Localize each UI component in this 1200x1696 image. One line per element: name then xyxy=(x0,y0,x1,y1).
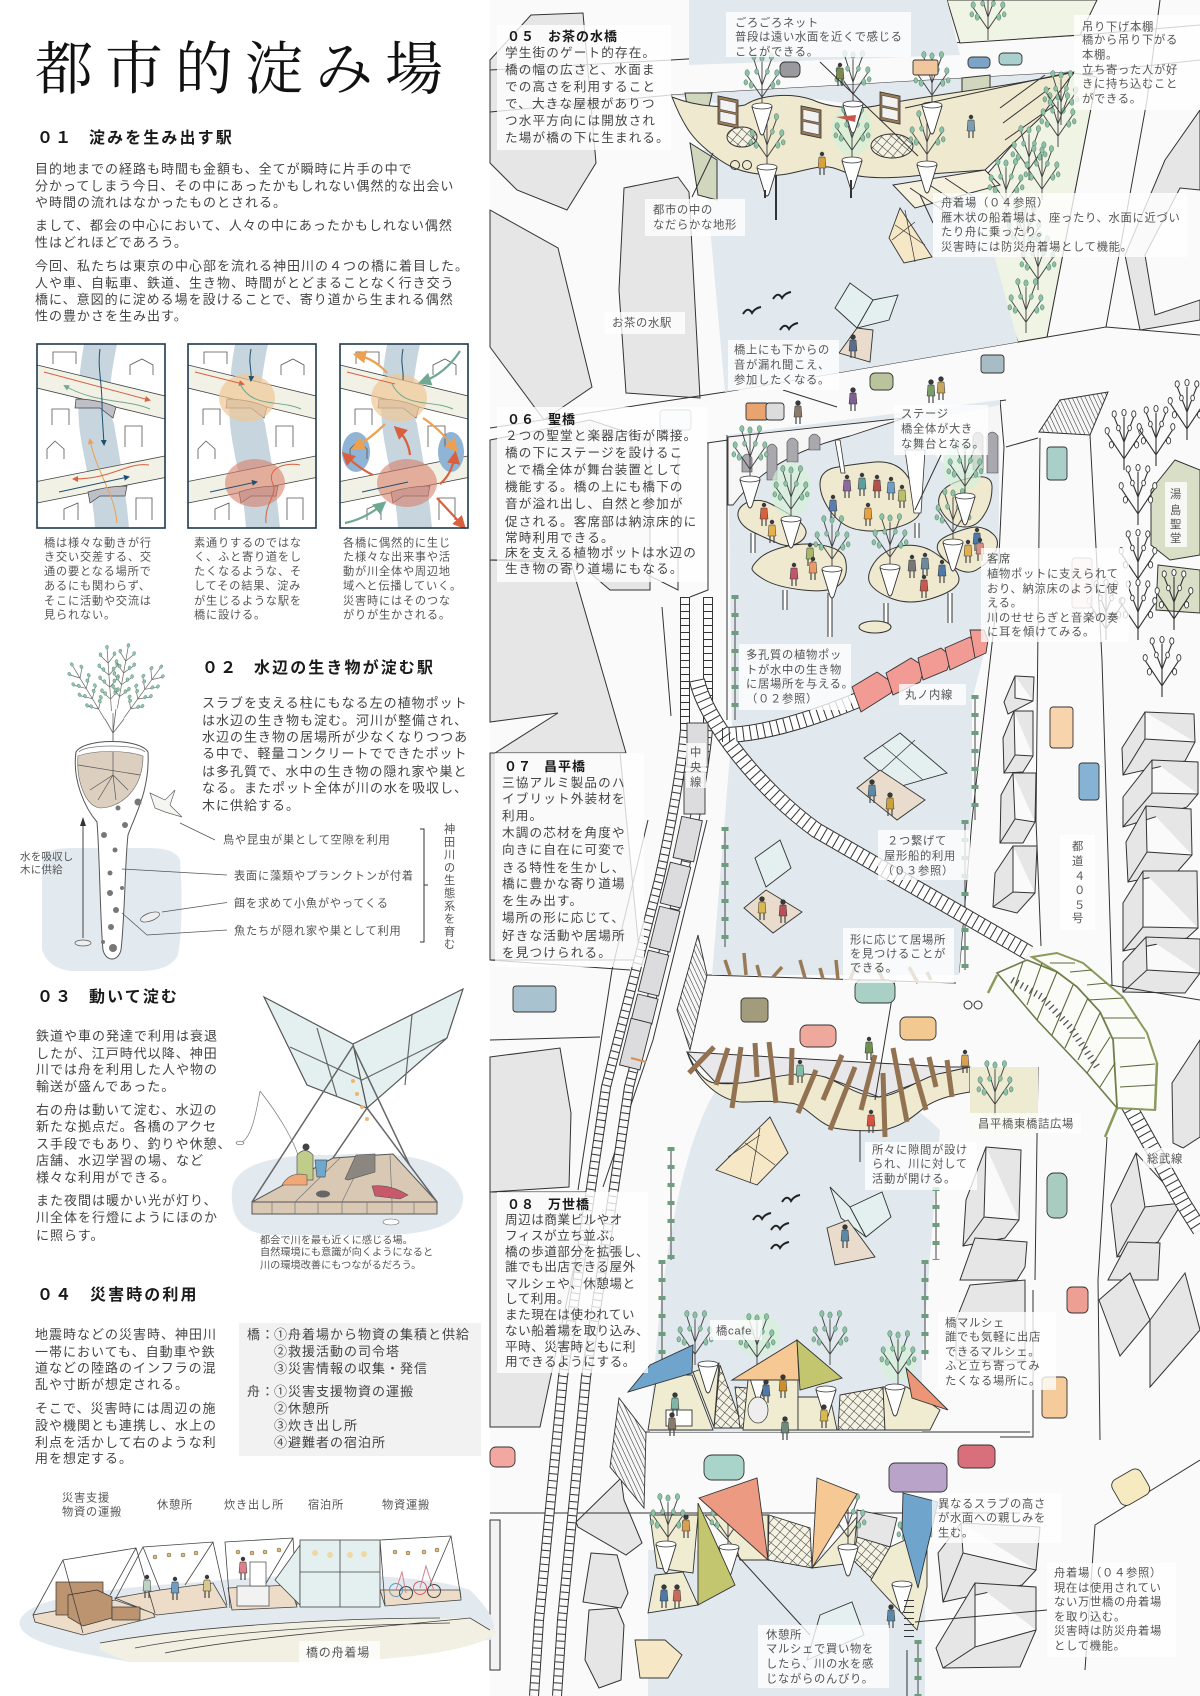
vertical label: ecosystem: 川 xyxy=(444,850,456,862)
illustration: moving boat tent xyxy=(232,989,463,1235)
note: find a place xyxy=(843,928,954,983)
note: hanging bookshelf: きに持ち込むこと xyxy=(1082,76,1178,90)
label: Metropolitan road 405: 道 xyxy=(1072,854,1084,868)
text block 03: ス手段でもあり、釣りや休憩、 xyxy=(36,1137,231,1152)
callout 06: Hijiri bridge: 促される。客席部は納涼床的に xyxy=(505,514,697,529)
note: bridge marche xyxy=(938,1312,1056,1390)
note: slab height: 異なるスラブの高さ xyxy=(938,1496,1046,1510)
labels: boat uses: 炊き出し所 xyxy=(224,1497,284,1511)
text block 03: 鉄道や車の発達で利用は衰退 xyxy=(36,1029,218,1044)
note: boat landing at Mansei: を取り込む。 xyxy=(1054,1610,1126,1623)
callout 05: Ochanomizu bridge: で、大きな屋根がありつ xyxy=(505,97,656,111)
plant strips xyxy=(947,0,1097,342)
callout 07: Shohei bridge: を生み出す。 xyxy=(502,894,583,908)
callout 08: Mansei bridge: 万世橋 xyxy=(548,1197,590,1212)
label: Yushima Seido xyxy=(1165,482,1187,547)
text block 04: 用を想定する。 xyxy=(35,1451,133,1466)
callouts: ecosystem labels: 餌を求めて小魚がやってくる xyxy=(234,896,389,910)
floating tents upper xyxy=(743,208,932,362)
note: porous pots xyxy=(739,644,854,710)
note: find a place: を見つけることが xyxy=(850,946,946,960)
label: bridge cafe: 橋cafe xyxy=(716,1323,752,1337)
callout 07: Shohei bridge: 三協アルミ製品のハ xyxy=(502,776,626,790)
callout 05: Ochanomizu bridge: た場が橋の下に生まれる。 xyxy=(505,131,670,145)
heading 01: ０１ xyxy=(37,130,73,147)
callout 08: Mansei bridge: マルシェや、休憩場と xyxy=(505,1276,636,1291)
diagram: activity spreading across the district xyxy=(340,344,468,528)
diagram: bridges as they are xyxy=(37,344,165,528)
label: water absorption: 水を吸収し xyxy=(20,851,74,863)
note: hanging bookshelf: 吊り下げ本棚 xyxy=(1082,19,1154,33)
callout 08: Mansei bridge xyxy=(497,1192,649,1373)
note: audience seats: 植物ポットに支えられて xyxy=(987,566,1119,580)
callout 08: Mansei bridge: 誰でも出店できる屋外 xyxy=(505,1259,636,1274)
caption: diagram 2: が生じるような駅を xyxy=(194,593,302,607)
title: 都市的淀み場 xyxy=(35,37,455,102)
text block 02: なる。またポット全体が川の水を吸収し、 xyxy=(202,781,468,796)
note: find a place: 形に応じて居場所 xyxy=(850,932,946,946)
text block 04: 乱や寸断が想定される。 xyxy=(35,1377,189,1392)
caption: diagram 1: 通の要となる場所で xyxy=(44,564,152,578)
note: boat landing at Mansei: として機能。 xyxy=(1054,1638,1126,1652)
heading 03: ０３ xyxy=(37,989,73,1006)
note: bridge marche: たくなる場所に。 xyxy=(945,1373,1041,1387)
callout 06: Hijiri bridge: 床を支える植物ポットは水辺の xyxy=(505,545,697,560)
vertical label: ecosystem: 系 xyxy=(444,900,456,913)
caption: diagram 1: 橋は様々な動きが行 xyxy=(44,535,152,549)
note: gaps: られ、川に対して xyxy=(872,1157,968,1170)
callout 06: Hijiri bridge: とで橋全体が舞台装置として xyxy=(505,462,683,477)
heading 02: 水辺の生き物が淀む駅 xyxy=(254,658,435,677)
note: stage xyxy=(894,405,988,455)
note: boat landing at Mansei xyxy=(1047,1563,1176,1657)
callout 06: Hijiri bridge: ２つの聖堂と楽器店街が隣接。 xyxy=(505,428,697,443)
callout 08: Mansei bridge: 周辺は商業ビルやオ xyxy=(505,1212,623,1227)
labels: boat uses: 休憩所 xyxy=(157,1497,193,1511)
caption: diagram 2: 素通りするのではな xyxy=(194,536,302,549)
label: plaza xyxy=(970,1113,1081,1133)
text block 02 xyxy=(202,696,468,813)
right side trees xyxy=(1087,379,1200,697)
note: landing stage: 雁木状の船着場は、座ったり、水面に近づい xyxy=(941,210,1180,224)
callout 07: Shohei bridge: ０７ xyxy=(504,759,532,774)
panel: roles of bridge and boat: ②救援活動の司令塔 xyxy=(274,1344,400,1359)
buildings: right of map xyxy=(936,110,1200,1668)
illustration: planted pot habitat xyxy=(42,642,182,971)
vehicles: middle xyxy=(490,447,1152,1508)
note: boat landing at Mansei: 現在は使用されてい xyxy=(1054,1580,1162,1594)
label: Metropolitan road 405 xyxy=(1060,835,1095,930)
caption: diagram 2 xyxy=(194,536,302,621)
note: rest area: じながらのんびり。 xyxy=(766,1671,874,1685)
text block 02: 木に供給する。 xyxy=(202,798,300,813)
labels: boat uses: 宿泊所 xyxy=(308,1497,344,1511)
note: roll net: 普段は遠い水面を近くで感じる xyxy=(735,29,903,43)
vertical label: ecosystem: 田 xyxy=(444,837,456,849)
callout 06: Hijiri bridge: 生き物の寄り道場にもなる。 xyxy=(505,562,684,576)
callouts: ecosystem labels: 表面に藻類やプランクトンが付着 xyxy=(234,868,414,882)
text block 03: 右の舟は動いて淀む、水辺の xyxy=(36,1102,218,1118)
callout 05: Ochanomizu bridge: お茶の水橋 xyxy=(548,29,618,44)
vertical label: ecosystem: を xyxy=(444,913,456,926)
note: landing stage xyxy=(933,193,1187,257)
text block 01: 性の豊かさを生み出す。 xyxy=(35,308,188,324)
caption: diagram 2: 橋に設ける。 xyxy=(194,607,266,621)
text block 03: また夜間は暖かい光が灯り、 xyxy=(36,1193,217,1208)
callout 08: Mansei bridge: また現在は使われてい xyxy=(505,1307,635,1322)
callout 06: Hijiri bridge: ０６ xyxy=(507,412,535,427)
label: Metropolitan road 405: ５ xyxy=(1074,900,1086,912)
callout 08: Mansei bridge: フィスが立ち並ぶ。 xyxy=(505,1229,623,1243)
note: landing stage: 舟着場（０４参照） xyxy=(941,195,1049,209)
Sobu and Marunouchi line tracks xyxy=(697,680,1200,1230)
note: find a place: できる。 xyxy=(850,961,898,974)
caption: diagram 3: 動が川全体や周辺地 xyxy=(343,564,451,578)
callout 07: Shohei bridge: 昌平橋 xyxy=(544,759,586,774)
callout 06: Hijiri bridge: 音が溢れ出し、自然と参加が xyxy=(505,496,684,511)
note: boat landing at Mansei: ない万世橋の舟着場 xyxy=(1054,1594,1162,1608)
note: rest area: 休憩所 xyxy=(766,1627,802,1641)
note: audience seats: 客席 xyxy=(987,551,1011,565)
note: boat landing at Mansei: 舟着場（０４参照） xyxy=(1054,1565,1162,1579)
bridge 08: upper market deck xyxy=(610,1310,948,1508)
callout 06: Hijiri bridge: 聖橋 xyxy=(548,412,576,427)
label: Chuo line: 央 xyxy=(690,761,702,774)
text block 01: 分かってしまう今日、その中にあったかもしれない偶然的な出会い xyxy=(35,179,454,194)
note: rest area: したら、川の水を感 xyxy=(766,1656,874,1670)
panel: roles of bridge and boat: ③災害情報の収集・発信 xyxy=(274,1361,428,1376)
callout 08: Mansei bridge: ０８ xyxy=(507,1197,535,1212)
text block 01: 目的地までの経路も時間も金額も、全てが瞬時に片手の中で xyxy=(35,162,413,177)
panel: roles of bridge and boat: 舟： xyxy=(247,1384,275,1399)
caption: boat: 都会で川を最も近くに感じる場。 xyxy=(260,1234,413,1246)
label: bridge cafe xyxy=(710,1320,762,1340)
buildings: left of map xyxy=(490,13,700,1688)
caption: diagram 1: 見られない。 xyxy=(44,608,116,621)
note: rest area: マルシェで買い物を xyxy=(766,1641,874,1655)
heading 03: 動いて淀む xyxy=(89,988,179,1006)
note: gentle terrain: 都市の中の xyxy=(653,203,713,216)
callout 06: Hijiri bridge: 橋の下にステージを設けるこ xyxy=(505,446,683,460)
diagram: stagnant pockets at the bridges xyxy=(188,344,316,528)
note: audience seats xyxy=(981,548,1129,642)
panel: river map xyxy=(490,0,1200,1696)
note: sound from below: 音が漏れ聞こえ、 xyxy=(734,357,830,371)
caption: boat xyxy=(260,1234,433,1272)
callout 08: Mansei bridge: ない船着場を取り込み、 xyxy=(505,1323,649,1338)
text block 01: 橋に、意図的に淀める場を設けることで、寄り道から生まれる偶然 xyxy=(35,292,454,307)
text block 02: は水辺の生き物も淀む。河川が整備され、 xyxy=(202,713,468,728)
label: Yushima Seido: 島 xyxy=(1170,503,1182,517)
text block 03: 川では舟を利用した人や物の xyxy=(36,1062,218,1077)
illustration: disaster boats and pier xyxy=(20,1536,497,1662)
callout 07: Shohei bridge: きる特性を生かし、 xyxy=(502,861,625,875)
label: Yushima Seido: 湯 xyxy=(1170,488,1182,501)
note: bridge marche: できるマルシェ。 xyxy=(945,1345,1040,1358)
panel: roles of bridge and boat: 橋： xyxy=(247,1327,275,1342)
note: bridge marche: 橋マルシェ xyxy=(945,1315,1005,1329)
bridge 05: road underside and deck xyxy=(672,50,1074,223)
callouts: ecosystem labels: 鳥や昆虫が巣として空隙を利用 xyxy=(223,832,390,846)
vine plants along banks xyxy=(662,595,975,1696)
callout 05: Ochanomizu bridge: ０５ xyxy=(507,29,535,44)
bridge 07 tents xyxy=(677,733,947,1050)
vertical label: ecosystem: 育 xyxy=(444,925,456,938)
vertical label: ecosystem: 神 xyxy=(444,822,456,836)
panel: roles of bridge and boat: ①災害支援物資の運搬 xyxy=(274,1384,414,1399)
text block 01: まして、都会の中心において、人々の中にあったかもしれない偶然 xyxy=(35,218,453,233)
label: water absorption xyxy=(20,851,74,876)
caption: diagram 1 xyxy=(44,535,152,621)
text block 02: スラブを支える柱にもなる左の植物ポット xyxy=(202,696,468,711)
callouts: ecosystem labels xyxy=(122,823,414,937)
callout 06: Hijiri bridge: 機能する。橋の上にも橋下の xyxy=(505,480,684,494)
vehicles and people: upper xyxy=(660,53,1022,430)
Marunouchi line train xyxy=(852,630,988,712)
callout 05: Ochanomizu bridge: での高さを利用すること xyxy=(505,79,656,94)
caption: diagram 2: く、ふと寄り道をし xyxy=(194,549,302,563)
caption: diagram 3: 災害時にはそのつな xyxy=(343,594,451,607)
bridge 08: lower deck with canopies and nets xyxy=(648,1478,1047,1696)
panel: roles of bridge and boat: ②休憩所 xyxy=(274,1401,330,1416)
river water xyxy=(648,0,1072,1696)
label: plaza: 昌平橋東橋詰広場 xyxy=(978,1116,1074,1130)
note: hanging bookshelf: ができる。 xyxy=(1082,91,1142,105)
label: water absorption: 木に供給 xyxy=(20,863,63,876)
labels: boat uses: 物資運搬 xyxy=(382,1497,430,1511)
label: Marunouchi line: 丸ノ内線 xyxy=(905,687,953,701)
text block 04: 設や機関とも連携し、水上の xyxy=(35,1418,217,1433)
note: hanging bookshelf: 立ち寄った人が好 xyxy=(1082,62,1178,76)
text block 01: や時間の流れはなかったものとされる。 xyxy=(35,195,287,210)
panel: roles of bridge and boat: ③炊き出し所 xyxy=(274,1418,358,1433)
note: gaps: 活動が開ける。 xyxy=(872,1171,956,1185)
note: roll net: ことができる。 xyxy=(735,44,819,58)
label: Chuo line: 線 xyxy=(690,776,702,789)
note: audience seats: える。 xyxy=(987,596,1023,609)
callout 06: Hijiri bridge: 常時利用できる。 xyxy=(505,531,615,545)
text block 02: は多孔質で、水中の生き物の隠れ家や巣と xyxy=(202,764,467,779)
text block 04: 道などの陸路のインフラの混 xyxy=(35,1361,217,1376)
text block 02: る中で、軽量コンクリートでできたポット xyxy=(202,746,467,761)
heading 04: 災害時の利用 xyxy=(90,1285,199,1304)
vertical label: ecosystem: む xyxy=(444,938,456,951)
note: two boats joined xyxy=(878,830,970,880)
Hijiri arch of the Sobu line xyxy=(988,953,1157,1137)
bridge 06: arches and floating seating decks xyxy=(648,405,1000,720)
callout 07: Shohei bridge xyxy=(495,753,644,967)
note: gentle terrain: なだらかな地形 xyxy=(653,218,737,231)
note: audience seats: に耳を傾けてみる。 xyxy=(987,625,1095,638)
caption: diagram 3: 域へと伝播していく。 xyxy=(343,578,462,592)
note: two boats joined: （０３参照） xyxy=(882,864,954,877)
label: Chuo line xyxy=(686,743,706,789)
text block 03 xyxy=(36,1029,231,1243)
callout 05: Ochanomizu bridge: 学生街のゲート的存在。 xyxy=(505,45,656,60)
note: boat landing at Mansei: 災害時は防災舟着場 xyxy=(1054,1623,1162,1637)
callout 08: Mansei bridge: 平時、災害時ともに利 xyxy=(505,1339,636,1354)
label: Metropolitan road 405: ０ xyxy=(1074,885,1086,897)
text block 03: 川全体を行燈にようにほのか xyxy=(36,1210,218,1225)
label: Chuo line: 中 xyxy=(690,746,702,759)
note: gentle terrain xyxy=(645,199,745,236)
callout 08: Mansei bridge: 橋の歩道部分を拡張し、 xyxy=(505,1245,649,1259)
label: Yushima Seido: 堂 xyxy=(1170,532,1182,545)
note: stage: な舞台となる。 xyxy=(901,436,985,450)
road lines xyxy=(490,0,1200,1670)
vertical label: ecosystem: 態 xyxy=(444,887,456,900)
note: gaps xyxy=(865,1142,977,1190)
note: porous pots: に居場所を与える。 xyxy=(746,676,854,690)
label: Yushima Seido: 聖 xyxy=(1170,518,1182,531)
text block 03: 新たな拠点だ。各橋のアクセ xyxy=(36,1119,217,1134)
note: slab height: が水面への親しみを xyxy=(938,1510,1046,1524)
bridge 07: wave deck and wooden slats xyxy=(687,980,1038,1162)
note: stage: 橋全体が大き xyxy=(901,421,973,435)
note: porous pots: （０２参照） xyxy=(746,692,818,705)
note: slab height xyxy=(932,1493,1061,1543)
note: porous pots: トが水中の生き物 xyxy=(746,662,842,676)
panel: roles of bridge and boat: ①舟着場から物資の集積と供給 xyxy=(274,1327,470,1342)
text block 04: 地震時などの災害時、神田川 xyxy=(35,1327,217,1342)
note: two boats joined: ２つ繋げて xyxy=(887,833,947,847)
note: sound from below: 参加したくなる。 xyxy=(734,373,830,386)
text block 02: 水辺の生き物の居場所が少なくなりつつあ xyxy=(202,729,468,744)
label: Ochanomizu station xyxy=(605,312,685,334)
callout 07: Shohei bridge: 向きに自在に可変で xyxy=(502,842,626,857)
text block 01 xyxy=(35,162,469,324)
caption: boat: 川の環境改善にもつながるだろう。 xyxy=(260,1258,421,1272)
vertical label: ecosystem: の xyxy=(444,862,456,874)
note: landing stage: たり舟に乗ったり。 xyxy=(941,224,1049,238)
note: bridge marche: 誰でも気軽に出店 xyxy=(945,1329,1041,1343)
callout 05: Ochanomizu bridge xyxy=(497,25,671,150)
text block 03: 輸送が盛んであった。 xyxy=(36,1079,175,1094)
text block 04 xyxy=(35,1327,217,1466)
text block 01: 人や車、自転車、鉄道、生き物、時間がとどまることなく行き交う xyxy=(35,275,455,290)
text block 03: 店舗、水辺学習の場、など xyxy=(36,1153,204,1168)
text block 03: 様々な利用ができる。 xyxy=(36,1170,176,1185)
callout 05: Ochanomizu bridge: つ水平方向には開放され xyxy=(505,113,656,128)
callouts: ecosystem labels: 魚たちが隠れ家や巣として利用 xyxy=(234,923,402,937)
caption: diagram 3: がりが生かされる。 xyxy=(343,607,451,621)
bridge 08 lower river tents and birds xyxy=(635,1117,891,1678)
label: Ochanomizu station: お茶の水駅 xyxy=(612,315,672,329)
note: rest area xyxy=(758,1625,889,1688)
caption: diagram 2: たくなるような、そ xyxy=(194,565,302,578)
heading 01: 淀みを生み出す駅 xyxy=(89,129,234,147)
note: audience seats: 川のせせらぎと音楽の奏 xyxy=(987,610,1119,624)
callout 07: Shohei bridge: 利用。 xyxy=(502,809,543,823)
note: landing stage: 災害時には防災舟着場として機能。 xyxy=(941,239,1133,253)
label: Marunouchi line xyxy=(899,684,966,705)
label: Metropolitan road 405: 都 xyxy=(1072,840,1084,853)
label: Metropolitan road 405: 号 xyxy=(1072,912,1084,925)
label: Sobu line xyxy=(1143,1148,1183,1168)
text block 03: したが、江戸時代以降、神田 xyxy=(36,1046,218,1061)
text block 04: そこで、災害時には周辺の施 xyxy=(35,1401,216,1416)
label: Metropolitan road 405: ４ xyxy=(1074,871,1086,883)
caption: diagram 1: そこに活動や交流は xyxy=(44,593,152,607)
callout 07: Shohei bridge: 橋に豊かな寄り道場 xyxy=(502,877,626,891)
caption: diagram 1: き交い交差する、交 xyxy=(44,550,152,563)
caption: diagram 3: 各橋に偶然的に生じ xyxy=(343,535,451,549)
labels: boat uses: 物資の運搬 xyxy=(62,1504,122,1518)
callout 05: Ochanomizu bridge: 橋の幅の広さと、水面ま xyxy=(505,63,656,77)
note: hanging bookshelf: 本棚。 xyxy=(1082,47,1118,61)
note: stage: ステージ xyxy=(901,408,949,420)
text block 01: 今回、私たちは東京の中心部を流れる神田川の４つの橋に着目した。 xyxy=(35,259,469,274)
note: audience seats: おり、納涼床のように使 xyxy=(987,581,1119,595)
labels: boat uses xyxy=(62,1490,430,1518)
label: Sobu line: 総武線 xyxy=(1147,1151,1183,1165)
Chuo line train xyxy=(619,723,708,1070)
panel: roles of bridge and boat: ④避難者の宿泊所 xyxy=(274,1435,386,1450)
note: hanging bookshelf: 橋から吊り下がる xyxy=(1082,32,1178,46)
note: sound from below xyxy=(728,340,839,390)
caption: boat: 自然環境にも意識が向くようになると xyxy=(260,1246,433,1258)
bracket xyxy=(420,829,428,942)
panel: roles of bridge and boat xyxy=(239,1323,481,1456)
callout 07: Shohei bridge: を見つけられる。 xyxy=(502,946,612,960)
caption: diagram 2: してその結果、淀み xyxy=(194,579,301,592)
caption: diagram 3 xyxy=(343,535,462,621)
note: roll net xyxy=(726,12,911,58)
callout 06: Hijiri bridge xyxy=(497,407,707,582)
callout 07: Shohei bridge: 場所の形に応じて、 xyxy=(502,911,625,925)
callout 07: Shohei bridge: イブリット外装材を xyxy=(502,791,626,806)
note: sound from below: 橋上にも下からの xyxy=(734,342,830,356)
arrow: water absorption xyxy=(80,817,86,938)
label: bridge pier: 橋の舟着場 xyxy=(306,1644,370,1659)
text block 01: 性はどれほどであろう。 xyxy=(35,235,188,250)
caption: diagram 3: た様々な出来事や活 xyxy=(343,549,451,563)
note: bridge marche: ふと立ち寄ってみ xyxy=(945,1358,1040,1372)
text block 03: に照らす。 xyxy=(36,1228,104,1243)
callout 07: Shohei bridge: 木調の芯材を角度や xyxy=(502,825,626,840)
heading 02: ０２ xyxy=(202,660,238,677)
plant strip trees xyxy=(970,0,1079,333)
label: bridge pier xyxy=(299,1641,380,1662)
Chuo line tracks xyxy=(534,597,708,1696)
heading 04: ０４ xyxy=(37,1287,73,1304)
note: hanging bookshelf xyxy=(1074,15,1200,110)
note: gaps: 所々に隙間が設け xyxy=(872,1142,968,1156)
vertical label: ecosystem: 生 xyxy=(444,873,456,887)
note: two boats joined: 屋形船的利用 xyxy=(884,848,956,862)
callout 08: Mansei bridge: して利用。 xyxy=(505,1292,570,1306)
callout 08: Mansei bridge: 用できるようにする。 xyxy=(505,1355,636,1369)
caption: diagram 1: あるにも関わらず、 xyxy=(44,579,151,592)
note: porous pots: 多孔質の植物ポッ xyxy=(746,647,842,661)
note: slab height: 生む。 xyxy=(938,1525,974,1539)
note: roll net: ごろごろネット xyxy=(735,15,819,29)
labels: boat uses: 災害支援 xyxy=(62,1490,110,1504)
text block 04: 一帯においても、自動車や鉄 xyxy=(35,1345,216,1360)
text block 04: 利点を活かして右のような利 xyxy=(35,1435,217,1450)
callout 07: Shohei bridge: 好きな活動や居場所 xyxy=(502,929,626,943)
